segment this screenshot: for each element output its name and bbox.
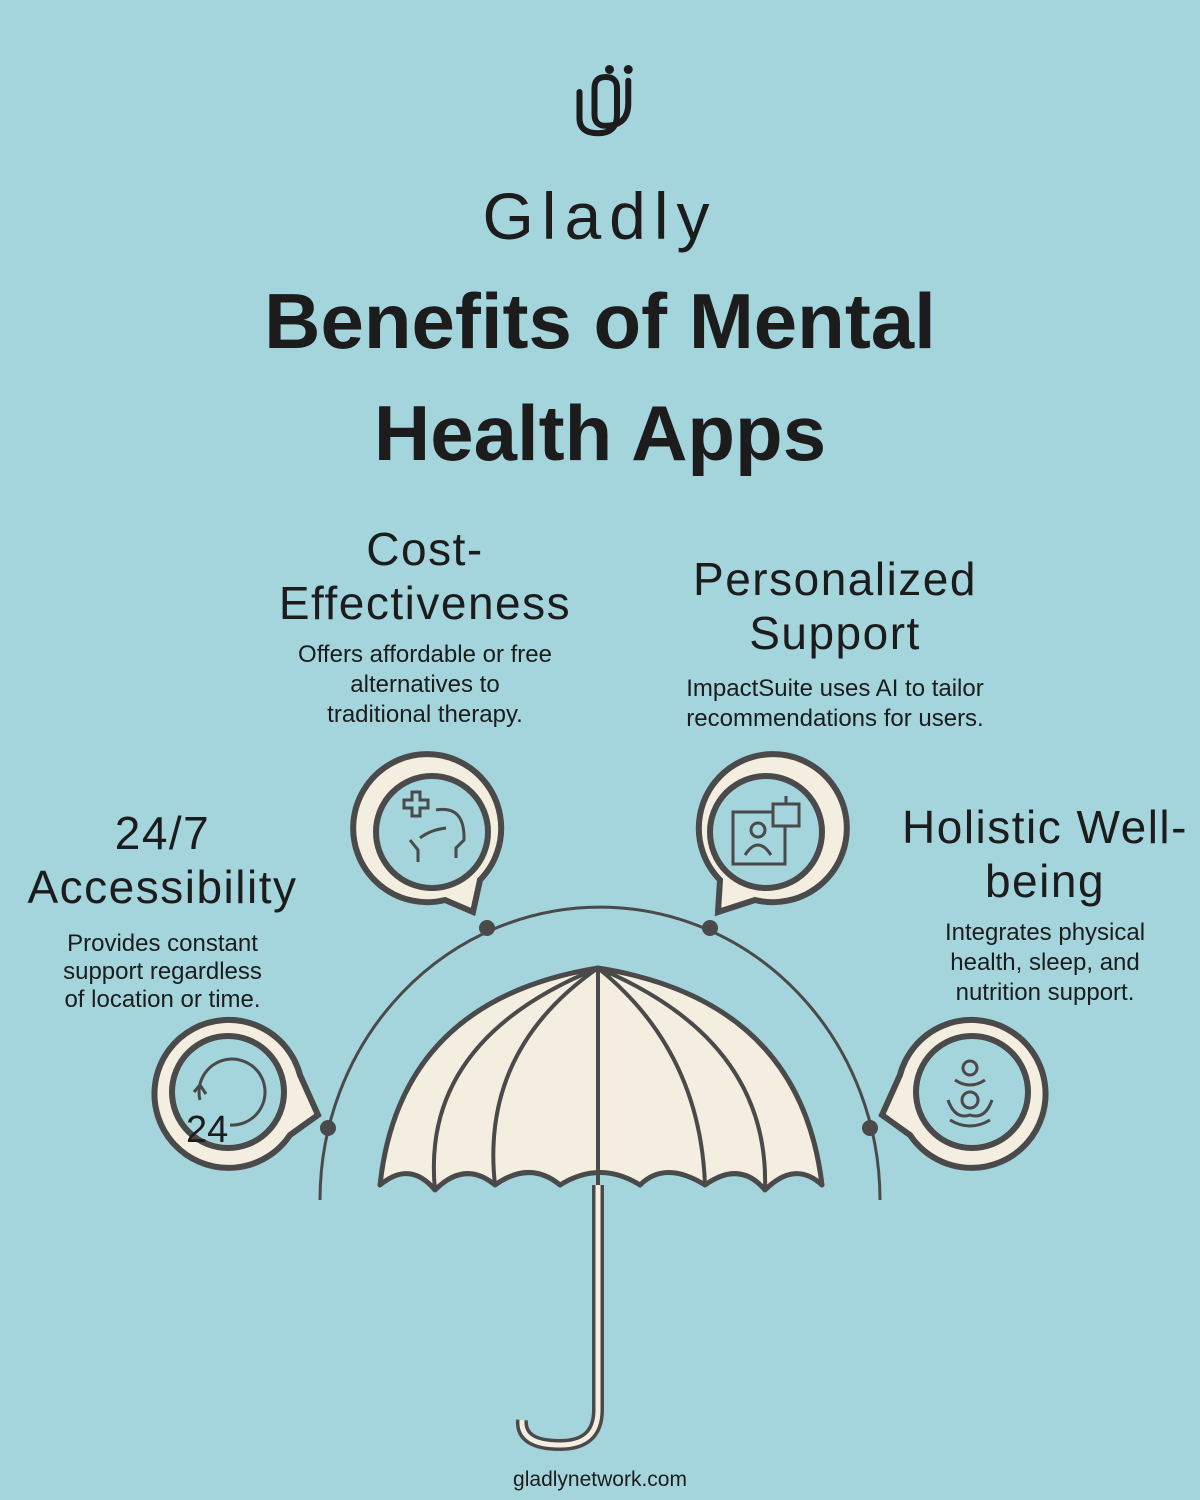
text: cost-effectiveness: alternatives to [350, 671, 500, 698]
icon: head with cross [404, 792, 464, 862]
text: 24/7 accessibility: Accessibility [27, 861, 298, 913]
brand name: Gladly [482, 179, 718, 253]
text: cost-effectiveness: traditional therapy. [327, 701, 523, 728]
text: holistic well-being [902, 801, 1188, 1006]
text: cost-effectiveness: Effectiveness [279, 577, 571, 629]
icon: wellbeing figure [948, 1061, 992, 1126]
text: 24/7 accessibility: support regardless [63, 958, 262, 985]
text: holistic well-being: Integrates physical [945, 919, 1145, 946]
text: 24/7 accessibility: 24/7 [115, 807, 210, 859]
title [264, 277, 936, 477]
logo [576, 65, 633, 136]
text: personalized support: Support [749, 607, 921, 659]
bubble: cost [353, 754, 501, 912]
diagram: arc and umbrella: 24 [186, 1109, 228, 1151]
text: cost-effectiveness [279, 523, 571, 728]
text: holistic well-being: nutrition support. [956, 979, 1134, 1006]
text: personalized support: ImpactSuite uses AI to tailor [686, 675, 984, 702]
umbrella [380, 968, 822, 1445]
text: cost-effectiveness: Offers affordable or free [298, 641, 552, 668]
text: personalized support: Personalized [693, 553, 977, 605]
title: Benefits of Mental [264, 277, 936, 365]
text: holistic well-being: being [985, 855, 1105, 907]
text: cost-effectiveness: Cost- [366, 523, 484, 575]
text: holistic well-being: health, sleep, and [950, 949, 1140, 976]
bubble: personalized [699, 754, 847, 912]
bubble: holistic [882, 1020, 1046, 1168]
text: 24/7 accessibility: of location or time. [64, 986, 261, 1013]
footer url: gladlynetwork.com [513, 1468, 687, 1491]
title: Health Apps [374, 389, 826, 477]
icon: 24 clock arrow [194, 1059, 265, 1125]
text: 24/7 accessibility [27, 807, 298, 1013]
text: personalized support [686, 553, 984, 732]
icon: profile with bot [733, 796, 799, 864]
bubble: accessibility [154, 1020, 318, 1168]
text: holistic well-being: Holistic Well- [902, 801, 1188, 853]
text: 24/7 accessibility: Provides constant [67, 930, 258, 957]
text: personalized support: recommendations for users. [686, 705, 984, 732]
